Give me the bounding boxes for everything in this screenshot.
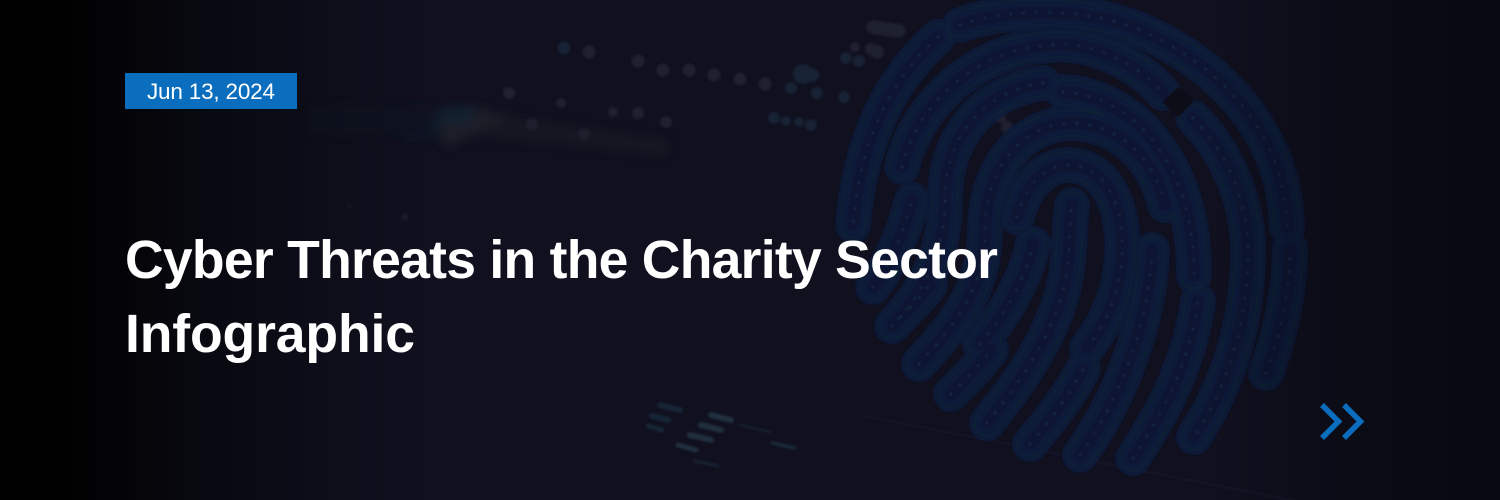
bottom keyboard light streaks: [648, 405, 1330, 500]
date badge: Jun 13, 2024: [147, 79, 275, 104]
icon: double chevron arrow: [1322, 405, 1360, 438]
title: Cyber Threats in the Charity Sector: [125, 231, 998, 290]
title: [125, 231, 998, 364]
title: Infographic: [125, 305, 415, 364]
fingerprint: [853, 12, 1290, 458]
date badge: [125, 73, 297, 109]
bokeh light streak: [310, 105, 670, 156]
fingerprint dark gap: [1162, 86, 1194, 118]
bokeh circuit lights: [346, 19, 1013, 221]
